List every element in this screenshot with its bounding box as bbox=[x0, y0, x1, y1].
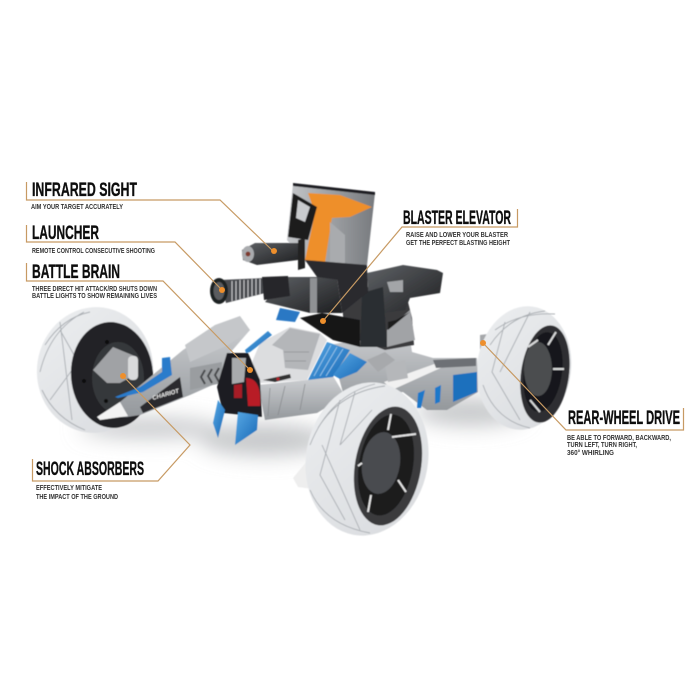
launcher barrel bbox=[210, 276, 290, 304]
description: RAISE AND LOWER YOUR BLASTER bbox=[406, 230, 508, 239]
emblem bbox=[288, 193, 317, 240]
description bbox=[32, 284, 157, 300]
leader line bbox=[323, 209, 518, 321]
description: GET THE PERFECT BLASTING HEIGHT bbox=[406, 238, 510, 247]
description: BE ABLE TO FORWARD, BACKWARD, bbox=[567, 433, 671, 442]
hub block bbox=[93, 347, 138, 383]
rear wheel bbox=[469, 300, 579, 436]
leader line bbox=[26, 182, 273, 251]
callout: infrared sight bbox=[26, 179, 277, 254]
callout: battle brain bbox=[26, 261, 253, 373]
heading: BLASTER ELEVATOR bbox=[403, 207, 511, 229]
turret base bbox=[265, 265, 443, 350]
callout: launcher bbox=[26, 222, 225, 293]
description: 360° WHIRLING bbox=[567, 448, 614, 457]
leader line bbox=[26, 263, 250, 370]
callout: shock absorbers bbox=[32, 373, 190, 501]
chariot badge: CHARIOT bbox=[152, 388, 181, 402]
description: AIM YOUR TARGET ACCURATELY bbox=[31, 202, 123, 211]
ground shadow bbox=[80, 398, 525, 456]
heading: SHOCK ABSORBERS bbox=[36, 458, 144, 480]
ammo canister bbox=[287, 183, 375, 283]
description: THREE DIRECT HIT ATTACK/RD SHUTS DOWN bbox=[32, 284, 157, 293]
description bbox=[567, 433, 671, 457]
right chassis beam bbox=[330, 325, 478, 410]
description: THE IMPACT OF THE GROUND bbox=[36, 492, 118, 501]
description: EFFECTIVELY MITIGATE bbox=[36, 483, 102, 492]
infrared sight bbox=[242, 238, 305, 270]
heading: BATTLE BRAIN bbox=[32, 261, 120, 283]
leader line bbox=[32, 376, 190, 481]
chariot badge bbox=[140, 377, 183, 413]
description bbox=[36, 483, 118, 501]
heading: INFRARED SIGHT bbox=[32, 179, 137, 201]
leader line bbox=[26, 225, 222, 290]
description: BATTLE LIGHTS TO SHOW REMAINING LIVES bbox=[32, 291, 157, 300]
blue stripe bbox=[115, 357, 172, 398]
claw and battle brain bbox=[213, 353, 262, 445]
vehicle illustration bbox=[29, 183, 579, 545]
callout: rear-wheel drive bbox=[480, 340, 684, 457]
description bbox=[406, 230, 510, 247]
description: REMOTE CONTROL CONSECUTIVE SHOOTING bbox=[32, 246, 155, 255]
description: TURN LEFT, TURN RIGHT, bbox=[567, 440, 637, 449]
leader line bbox=[483, 343, 684, 430]
body shell bbox=[245, 327, 367, 420]
callout: blaster elevator bbox=[320, 207, 518, 324]
left arm bbox=[93, 316, 250, 420]
left wheel bbox=[29, 300, 161, 440]
front wheel bbox=[293, 373, 440, 545]
heading: LAUNCHER bbox=[32, 222, 99, 244]
